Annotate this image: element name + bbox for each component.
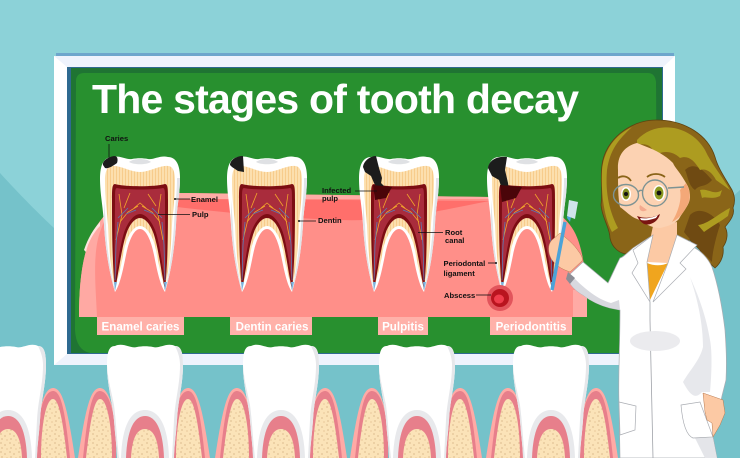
caries spot: [103, 156, 118, 168]
callout: abscess: [444, 291, 491, 300]
abscess: [487, 285, 513, 311]
callout: periodontal ligament: [444, 259, 497, 278]
tooth: periodontitis: [487, 157, 567, 311]
caries spot: [363, 156, 384, 190]
callout: periodontal ligament: ligament: [444, 269, 475, 278]
face shadow: [672, 183, 690, 222]
labels: anatomy callouts: [105, 134, 497, 300]
lapels: [632, 235, 697, 302]
callout: infected pulp: [322, 186, 377, 203]
stage label: pulpitis: [378, 317, 428, 335]
title: The stages of tooth decay: [92, 76, 579, 122]
callout: infected pulp: Infected: [322, 186, 351, 195]
hand holding brush: [549, 233, 582, 272]
stage label: periodontitis: Periodontitis: [496, 320, 566, 334]
row of teeth and gums: [0, 345, 618, 458]
tooth: enamel caries: [100, 156, 180, 292]
neck and chest: [647, 222, 677, 263]
coat shading: [630, 331, 680, 351]
callout: pulp: [158, 210, 209, 219]
callout: caries: [105, 134, 128, 158]
callout: infected pulp: pulp: [322, 194, 338, 203]
glasses: [614, 180, 684, 206]
toothbrush: [552, 200, 578, 290]
callout: enamel: [174, 195, 218, 204]
eyebrows: [618, 174, 665, 181]
coat: [568, 235, 726, 458]
callout: periodontal ligament: Periodontal: [444, 259, 485, 268]
mouth: [637, 214, 660, 225]
infected pulp shading: [500, 185, 522, 202]
callout: dentin: [298, 216, 342, 225]
coat centre line: [650, 302, 653, 458]
right hand: [703, 393, 725, 437]
stage label: enamel caries: Enamel caries: [102, 320, 180, 334]
face: [618, 143, 690, 228]
caries spot: [230, 156, 244, 172]
callout: dentin: Dentin: [318, 216, 342, 225]
tooth: pulpitis: [359, 156, 439, 292]
stage label: enamel caries: [97, 317, 184, 335]
shirt: [647, 263, 668, 300]
callout: caries: Caries: [105, 134, 128, 143]
chalkboard panel: [54, 53, 675, 365]
eyes: [621, 185, 665, 201]
callout: root canal: [418, 228, 464, 245]
stage label: periodontitis: [490, 317, 572, 335]
tooth: dentin caries: [227, 156, 307, 292]
callout: enamel: Enamel: [191, 195, 218, 204]
hair highlights: [602, 127, 730, 232]
callout: root canal: canal: [445, 236, 464, 245]
infected pulp shading: [373, 185, 392, 200]
callout: pulp: Pulp: [192, 210, 209, 219]
stage label: pulpitis: Pulpitis: [382, 320, 424, 334]
callout: root canal: Root: [445, 228, 463, 237]
nose: [639, 205, 647, 211]
background floor: [0, 173, 740, 458]
hair dark waves: [684, 166, 720, 262]
stage label: dentin caries: [230, 317, 312, 335]
gum illustration: [79, 193, 587, 317]
pockets: [619, 402, 713, 438]
hair: [601, 120, 735, 268]
dentist character: [549, 120, 735, 458]
caries spot: [488, 157, 509, 192]
callout: abscess: Abscess: [444, 291, 475, 300]
stage label: dentin caries: Dentin caries: [236, 320, 308, 334]
